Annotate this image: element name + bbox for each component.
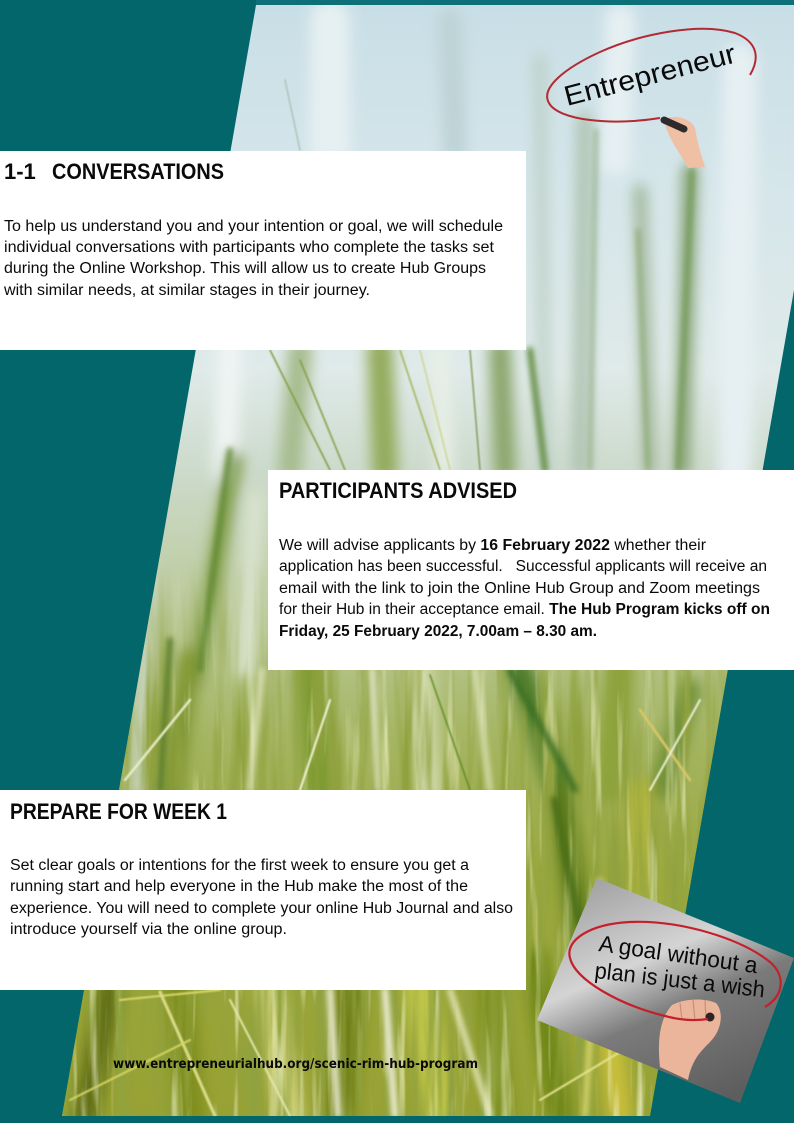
handwritten quote: plan is just a wish: [593, 957, 766, 1002]
text block: prepare body: Set clear goals or intentions for the first week to ensure you get a: [10, 857, 469, 874]
heading: participants advised: PARTICIPANTS ADVISED: [279, 478, 517, 503]
handwritten word: Entrepreneur: [561, 38, 739, 112]
text block: participants body: for their Hub in their acceptance email. The Hub Program kicks off on: [279, 601, 770, 618]
text block: prepare body: introduce yourself via the online group.: [10, 921, 287, 938]
red hand-drawn ellipse: [547, 29, 756, 122]
website url: www.entrepreneurialhub.org/scenic-rim-hub-program: [113, 1056, 478, 1072]
panel: participants advised: [268, 470, 794, 670]
text block: participants body: email with the link to join the Online Hub Group and Zoom meetings: [279, 580, 760, 597]
panel: prepare for week 1: [0, 790, 526, 990]
top teal strip: [256, 0, 794, 5]
callout: entrepreneur sketch: [547, 29, 756, 168]
text block: prepare body: experience. You will need to complete your online Hub Journal and also: [10, 900, 513, 917]
text block: prepare body: [10, 857, 513, 938]
text block: participants body: [279, 537, 770, 640]
text block: conversations body: with similar needs, at similar stages in their journey.: [3, 282, 370, 299]
text block: participants body: application has been successful. Successful applicants will receive an: [279, 558, 767, 575]
grey card: [537, 878, 794, 1103]
handwritten quote: [593, 930, 766, 1002]
panel: 1-1 conversations: [0, 151, 526, 350]
red ellipse: [569, 922, 781, 1020]
text block: conversations body: To help us understand you and your intention or goal, we will schedule: [4, 218, 503, 235]
heading: 1-1 conversations: 1-1: [4, 159, 36, 184]
heading: prepare for week 1: PREPARE FOR WEEK 1: [10, 799, 227, 824]
text block: conversations body: individual conversations with participants who complete the tasks set: [4, 239, 495, 256]
callout: goal card: [537, 878, 794, 1103]
text block: participants body: We will advise applicants by 16 February 2022 whether their: [279, 537, 706, 554]
text block: conversations body: during the Online Workshop. This will allow us to create Hub Groups: [4, 260, 486, 277]
text block: conversations body: [3, 218, 503, 299]
heading: 1-1 conversations: CONVERSATIONS: [52, 159, 224, 184]
icon: hand holding marker: [664, 117, 705, 168]
text block: participants body: Friday, 25 February 2022, 7.00am – 8.30 am.: [279, 623, 597, 640]
text block: prepare body: running start and help everyone in the Hub make the most of the: [10, 878, 468, 895]
icon: hand with marker: [659, 999, 721, 1080]
handwritten quote: A goal without a: [597, 930, 760, 978]
